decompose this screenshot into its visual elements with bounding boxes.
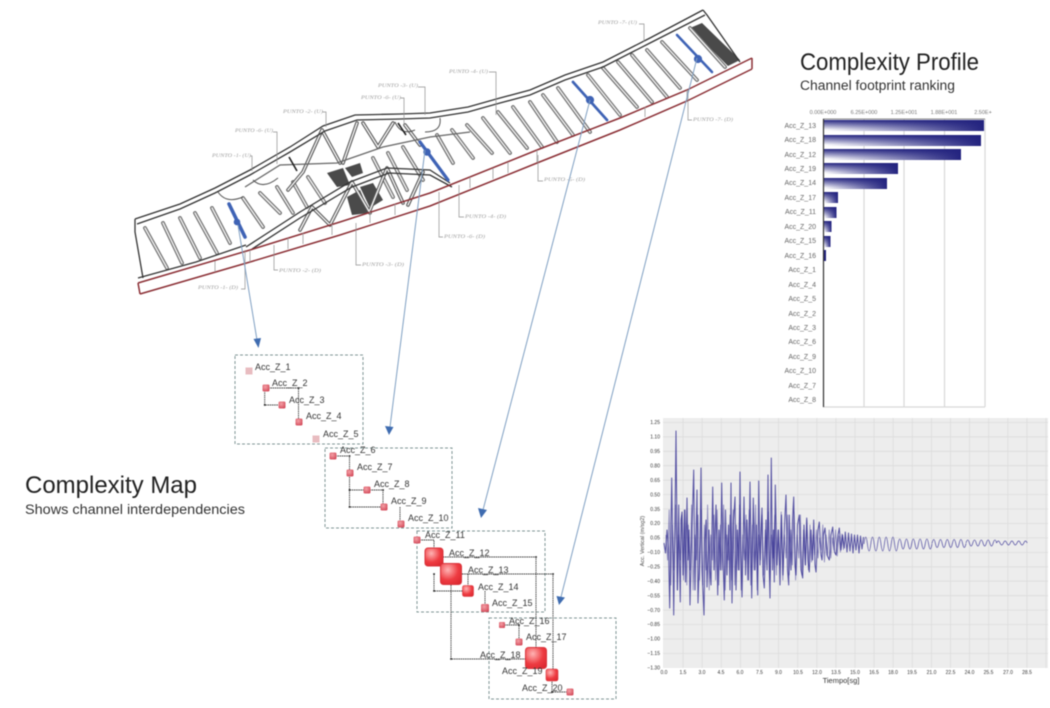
channel labels: Acc_Z_4 [788,282,816,289]
sensor point labels: PUNTO -1- (D) [197,286,238,291]
channel labels: Acc_Z_14 [784,180,816,187]
x axis ticks: 0.0 [661,670,668,676]
channel labels: Acc_Z_3 [788,325,816,332]
y axis ticks: −0.25 [647,564,660,570]
x axis ticks: 7.5 [756,670,763,676]
nodes: channels 11 to 15: Acc_Z_15 [492,598,533,608]
dependency connectors [265,388,570,692]
sensor point labels: PUNTO -4- (D) [464,215,506,220]
sensor point labels: PUNTO -6- (D) [443,235,485,240]
x axis ticks: 22.5 [946,670,956,676]
x axis ticks: 15.0 [850,670,860,676]
x axis ticks: 16.5 [869,670,879,676]
x axis title: Tiempo[sg] [823,676,859,685]
nodes: channels 11 to 15: Acc_Z_13 [468,565,509,575]
complexity profile heading: Channel footprint ranking [800,78,955,93]
nodes: channels 16 to 20: Acc_Z_18 [480,650,521,660]
nodes: channels 11 to 15: Acc_Z_14 [478,582,519,592]
nodes: channels 1 to 5: Acc_Z_1 [255,362,291,372]
y axis ticks: 0.95 [650,449,660,455]
nodes: channels 6 to 10: Acc_Z_7 [357,462,393,472]
nodes: channels 11 to 15: Acc_Z_11 [425,530,465,540]
nodes: channels 16 to 20 [480,616,574,696]
x axis ticks: 25.5 [984,670,994,676]
bar chart: channel footprint ranking: 1.88E+001 [931,110,957,116]
y axis ticks: −0.55 [647,594,660,600]
channel labels: Acc_Z_13 [784,123,816,130]
nodes: channels 1 to 5: Acc_Z_4 [306,411,342,421]
complexity map graph [235,355,616,699]
nodes: channels 16 to 20: Acc_Z_16 [509,616,550,626]
x axis ticks: 4.5 [718,670,725,676]
bridge truss diagram [135,10,752,294]
sensor point labels: PUNTO -6- (U) [360,96,401,101]
nodes: channels 1 to 5: Acc_Z_3 [289,395,325,405]
channel labels: Acc_Z_19 [784,166,816,173]
nodes: channels 1 to 5: Acc_Z_5 [323,429,359,439]
y axis ticks: 0.05 [650,536,660,542]
y axis ticks [647,420,660,672]
sensor point labels: PUNTO -2- (D) [278,269,321,274]
x axis ticks: 27.0 [1003,670,1013,676]
x axis ticks: 12.0 [812,670,822,676]
bar chart: channel footprint ranking: 6.25E+000 [851,110,877,116]
channel labels: Acc_Z_17 [784,195,816,202]
time series plot [640,418,1048,685]
nodes: channels 11 to 15: Acc_Z_12 [449,548,490,558]
y axis ticks: −0.40 [647,579,660,585]
sensor point labels: PUNTO -4- (U) [448,70,488,75]
sensor point labels: PUNTO -5- (D) [543,178,585,183]
red side rail [138,58,752,294]
x axis ticks: 21.0 [927,670,937,676]
nodes: channels 1 to 5: Acc_Z_2 [272,378,308,388]
y axis ticks: −1.00 [647,636,660,642]
sensor point labels: PUNTO -3- (U) [377,84,418,89]
y axis ticks: −0.10 [647,550,660,556]
blue sensor markers [229,35,712,237]
channel labels: Acc_Z_8 [788,397,816,404]
nodes: channels 11 to 15 [414,530,533,612]
bar chart: channel footprint ranking [784,110,992,407]
bars [824,120,984,261]
plot background [663,418,1048,668]
x axis ticks: 28.5 [1022,670,1032,676]
arrow: sensor 4 to fourth group [556,58,697,605]
nodes: channels 16 to 20: Acc_Z_20 [522,683,563,693]
sensor point labels [197,21,733,291]
arrow: sensor 1 to first group [238,225,261,348]
channel labels: Acc_Z_16 [784,253,816,260]
x axis ticks: 1.5 [680,670,687,676]
y axis ticks: −1.15 [647,651,660,657]
x axis ticks: 10.5 [793,670,803,676]
complexity map heading: Complexity Map [25,472,197,499]
y axis ticks: 0.35 [650,507,660,513]
chords [135,10,740,278]
nodes: channels 6 to 10: Acc_Z_10 [408,513,449,523]
x axis ticks: 24.0 [965,670,975,676]
nodes: channels 6 to 10 [330,445,449,528]
channel labels: Acc_Z_18 [784,137,816,144]
channel labels: Acc_Z_5 [788,296,816,303]
floor beams [145,28,725,268]
y axis ticks: 1.10 [650,434,660,440]
y axis ticks: −0.70 [647,608,660,614]
x axis ticks [661,670,1032,676]
nodes: channels 16 to 20: Acc_Z_19 [502,666,543,676]
y axis title: Acc. Vertical (m/sg2) [640,516,646,566]
channel labels: Acc_Z_10 [784,368,816,375]
sensor point labels: PUNTO -7- (U) [597,21,637,26]
nodes: channels 16 to 20: Acc_Z_17 [526,632,567,642]
channel labels: Acc_Z_20 [784,224,816,231]
nodes: channels 6 to 10: Acc_Z_8 [374,479,410,489]
channel labels: Acc_Z_6 [788,339,816,346]
x axis ticks: 19.5 [907,670,917,676]
x axis ticks: 13.5 [831,670,841,676]
sensor point labels: PUNTO -1- (U) [211,154,251,159]
x axis ticks: 9.0 [775,670,782,676]
y axis ticks: −1.30 [647,666,660,672]
sensor point labels: PUNTO -2- (U) [282,110,323,115]
channel labels: Acc_Z_11 [785,209,816,216]
nodes: channels 1 to 5 [246,362,359,442]
x axis ticks: 6.0 [737,670,744,676]
complexity profile heading [800,49,979,93]
channel labels: Acc_Z_7 [788,383,816,390]
channel labels: Acc_Z_9 [788,354,816,361]
x axis ticks: 3.0 [699,670,706,676]
arrow: sensor 3 to third group [478,100,590,518]
y axis ticks: 0.65 [650,478,660,484]
sensor point labels: PUNTO -7- (D) [692,118,733,123]
y axis ticks: 0.50 [650,492,660,498]
y axis ticks: −0.85 [647,622,660,628]
dashed group boxes [235,355,616,699]
y axis ticks: 0.20 [650,521,660,527]
complexity map heading: Shows channel interdependencies [25,501,245,517]
complexity profile heading: Complexity Profile [800,49,979,76]
nodes: channels 6 to 10: Acc_Z_9 [391,496,427,506]
bar chart: channel footprint ranking: 1.25E+001 [891,110,917,116]
channel labels: Acc_Z_15 [784,238,816,245]
channel labels: Acc_Z_1 [788,267,816,274]
bar chart: channel footprint ranking: 2.50E+ [974,110,992,116]
y axis ticks: 0.80 [650,464,660,470]
complexity map heading [25,472,245,517]
dark deck panels [327,23,740,215]
sensor point labels: PUNTO -3- (D) [361,263,404,268]
y axis ticks: 1.25 [650,420,660,426]
waveform [664,431,1027,615]
x axis ticks: 18.0 [888,670,898,676]
arrow: sensor 2 to second group [385,150,425,435]
sensor point labels: PUNTO -6- (U) [234,129,273,134]
bar chart: channel footprint ranking: 0.00E+000 [810,110,836,116]
channel labels: Acc_Z_2 [788,311,816,318]
truss lattice [288,123,423,230]
channel labels: Acc_Z_12 [784,152,816,159]
channel labels [784,123,816,404]
nodes: channels 6 to 10: Acc_Z_6 [340,445,376,455]
